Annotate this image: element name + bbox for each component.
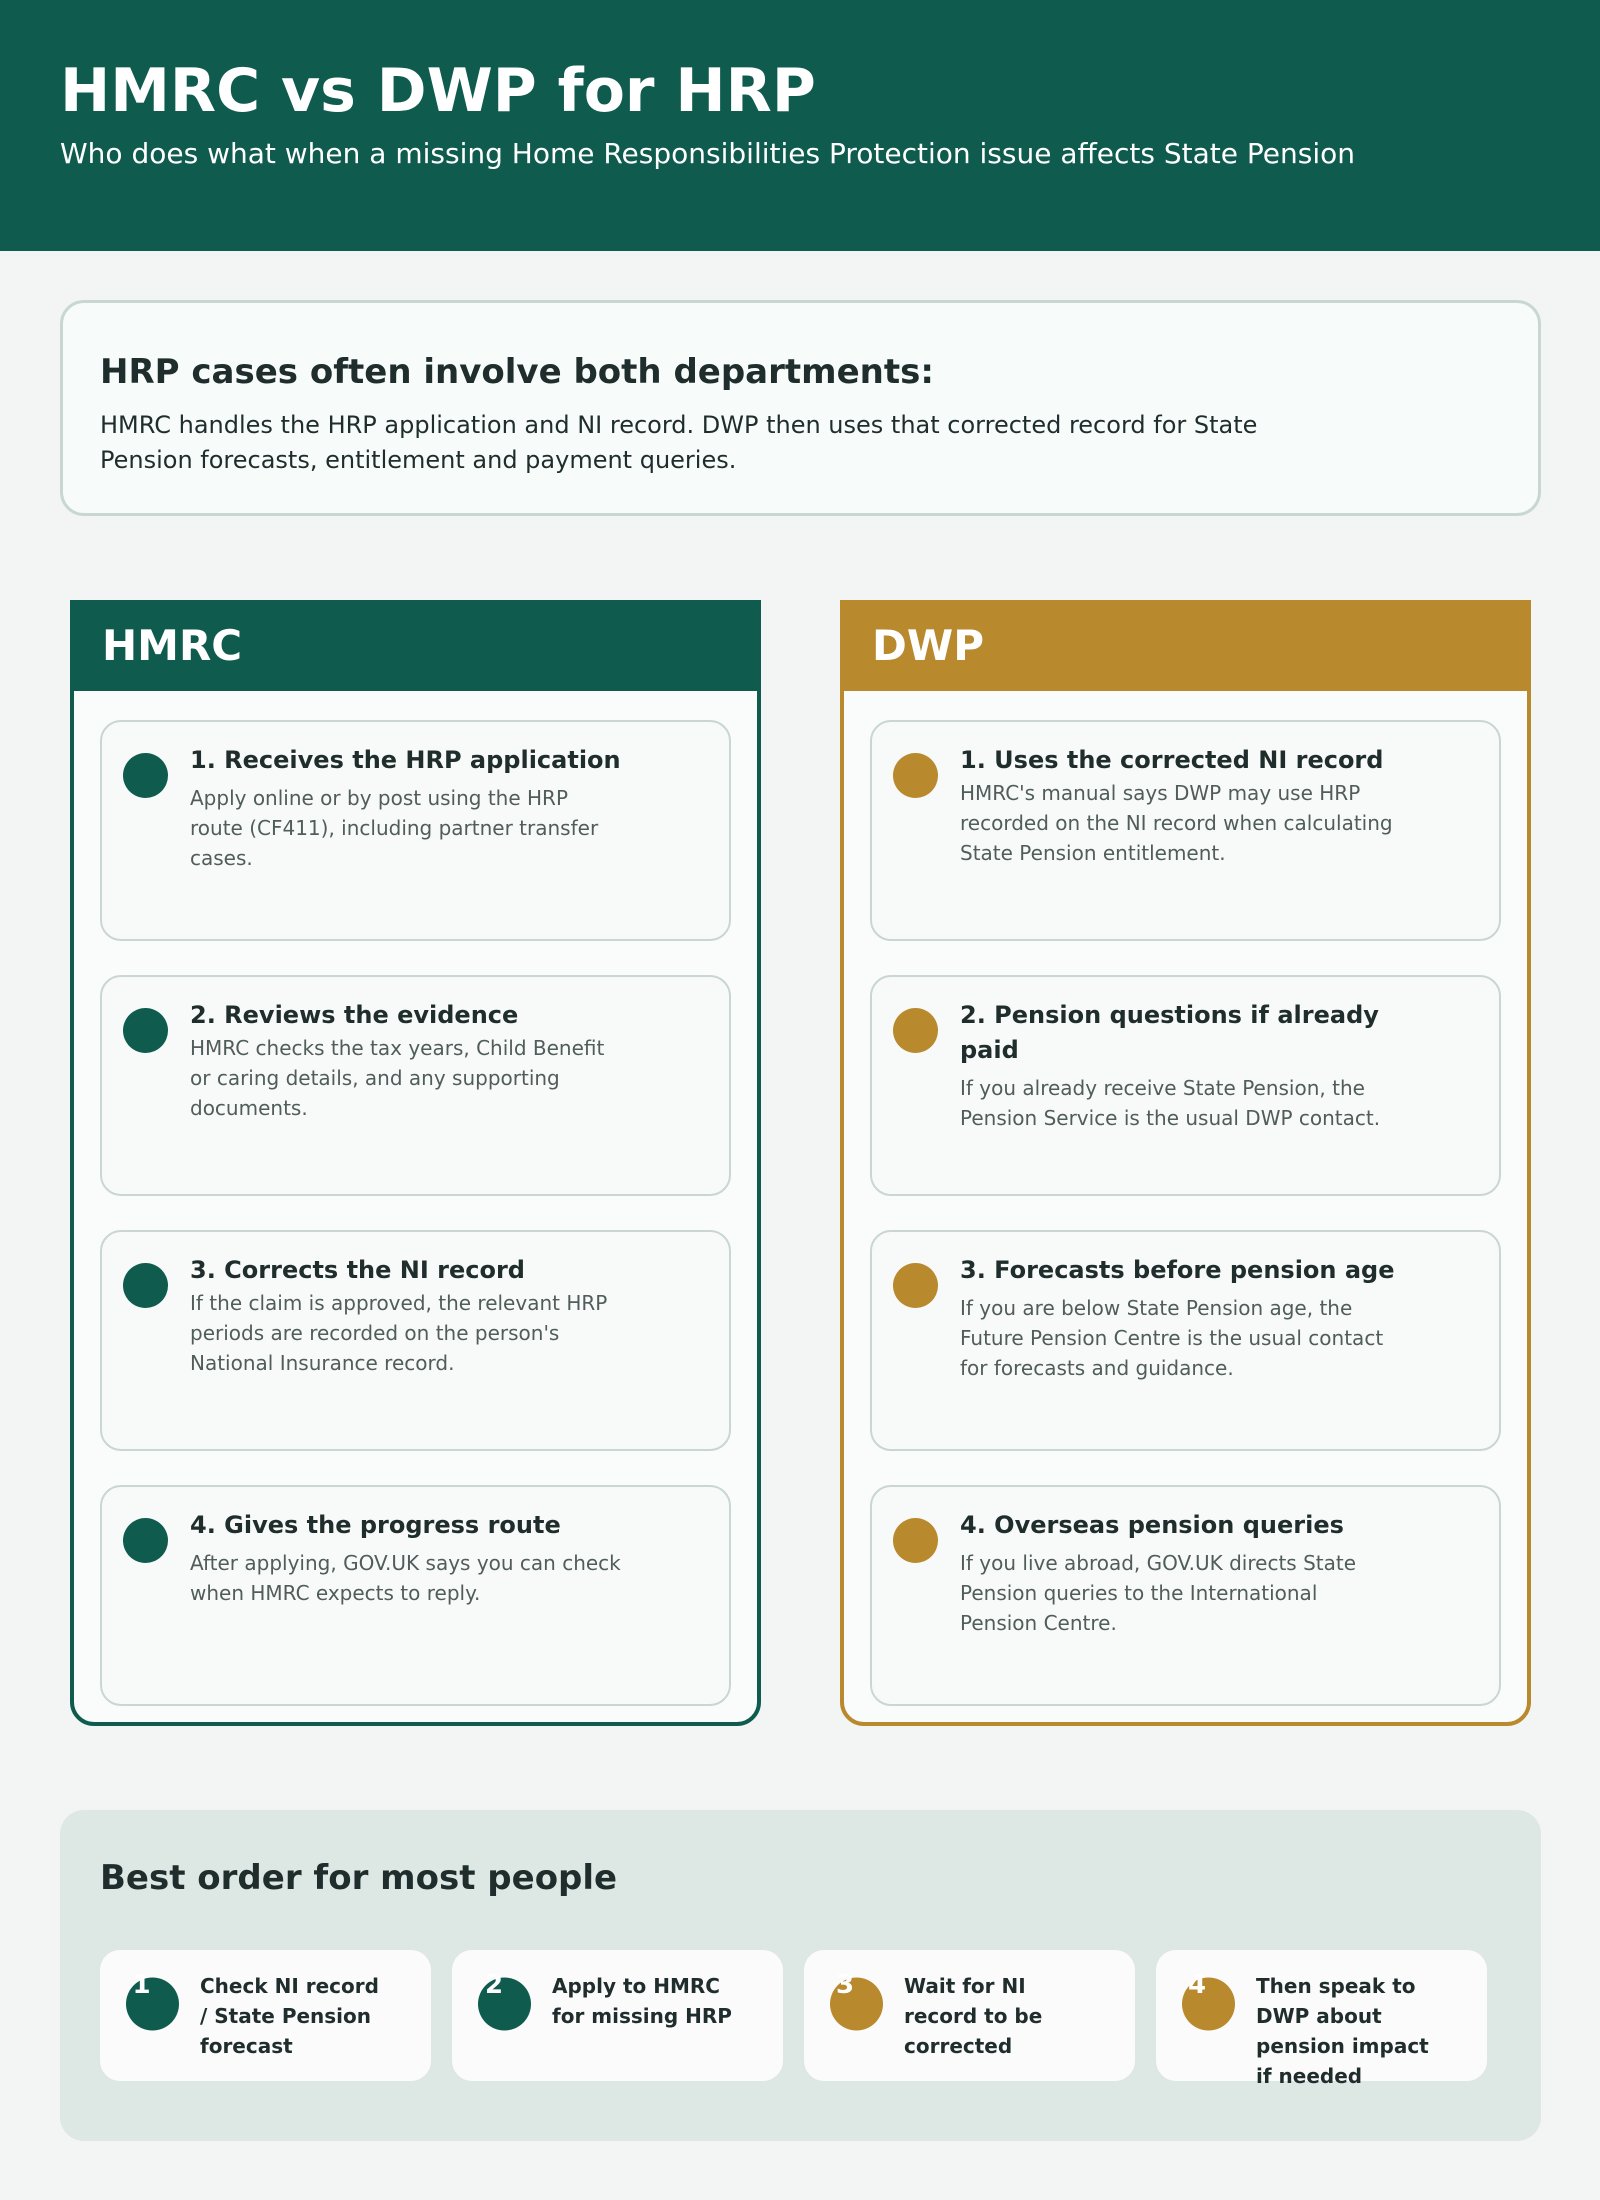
panel: HMRC	[70, 600, 761, 1724]
step: DWP 4: Pension Centre.	[960, 1611, 1117, 1635]
step: DWP 3: If you are below State Pension age, the	[960, 1296, 1352, 1320]
callout text: Pension forecasts, entitlement and payment queries.	[100, 446, 736, 474]
order step 4: DWP about	[1256, 2004, 1382, 2028]
order step 3: record to be	[904, 2004, 1042, 2028]
order step 3: corrected	[904, 2034, 1012, 2058]
step: DWP 1: recorded on the NI record when calculating	[960, 811, 1393, 835]
panel: best order	[60, 1810, 1541, 2141]
step: DWP 3: for forecasts and guidance.	[960, 1356, 1234, 1380]
step: HMRC 1: route (CF411), including partner transfer	[190, 816, 599, 840]
callout: both departments	[62, 302, 1540, 514]
order step 2: Apply to HMRC	[552, 1974, 720, 1998]
order step 1: 1	[132, 1970, 151, 2000]
step: DWP 3: 3. Forecasts before pension age	[960, 1256, 1395, 1284]
callout text: HMRC handles the HRP application and NI record. DWP then uses that corrected record for State	[100, 411, 1257, 439]
step: HMRC 1: 1. Receives the HRP application	[190, 746, 621, 774]
step: DWP 4: 4. Overseas pension queries	[960, 1511, 1344, 1539]
step: HMRC 3: If the claim is approved, the relevant HRP	[190, 1291, 607, 1315]
step: HMRC 3: 3. Corrects the NI record	[190, 1256, 525, 1284]
order step 3: 3	[836, 1970, 854, 2000]
step: DWP 2: 2. Pension questions if already	[960, 1001, 1379, 1029]
step: DWP 1: State Pension entitlement.	[960, 841, 1226, 865]
order step 1	[100, 1950, 431, 2081]
header band	[0, 0, 1600, 251]
step: HMRC 2	[101, 976, 730, 1195]
step: HMRC 4: when HMRC expects to reply.	[190, 1581, 480, 1605]
order step 4: if needed	[1256, 2064, 1362, 2088]
step: HMRC 3	[101, 1231, 730, 1450]
step: HMRC 2: documents.	[190, 1096, 308, 1120]
order step 4: Then speak to	[1256, 1974, 1416, 1998]
subtitle: Who does what when a missing Home Responsibilities Protection issue affects State Pension	[60, 137, 1355, 170]
HMRC heading: HMRC	[102, 621, 242, 670]
step: DWP 3	[871, 1231, 1500, 1450]
order step 2: for missing HRP	[552, 2004, 732, 2028]
order step 2: 2	[485, 1970, 503, 2000]
order step 3: Wait for NI	[904, 1974, 1026, 1998]
step: DWP 2	[871, 976, 1500, 1195]
step: DWP 2: Pension Service is the usual DWP contact.	[960, 1106, 1380, 1130]
order step 1: forecast	[200, 2034, 293, 2058]
step: HMRC 1: cases.	[190, 846, 253, 870]
step: DWP 4	[871, 1486, 1500, 1705]
order step 4: pension impact	[1256, 2034, 1429, 2058]
step: DWP 1: 1. Uses the corrected NI record	[960, 746, 1383, 774]
step: HMRC 3: National Insurance record.	[190, 1351, 454, 1375]
step: HMRC 4	[101, 1486, 730, 1705]
panel: DWP	[840, 600, 1531, 1724]
DWP heading: DWP	[872, 621, 984, 670]
order step 3	[804, 1950, 1135, 2081]
order step 4	[1156, 1950, 1487, 2088]
order step 1: Check NI record	[200, 1974, 379, 1998]
step: DWP 1: HMRC's manual says DWP may use HRP	[960, 781, 1360, 805]
step: DWP 1	[871, 721, 1500, 940]
callout heading: HRP cases often involve both departments:	[100, 352, 934, 392]
order step 1: / State Pension	[200, 2004, 371, 2028]
step: DWP 2: paid	[960, 1036, 1019, 1064]
step: HMRC 4: After applying, GOV.UK says you can check	[190, 1551, 621, 1575]
order step 4: 4	[1188, 1970, 1206, 2000]
step: HMRC 3: periods are recorded on the person's	[190, 1321, 559, 1345]
title: HMRC vs DWP for HRP	[60, 56, 816, 126]
step: DWP 3: Future Pension Centre is the usual contact	[960, 1326, 1383, 1350]
step: HMRC 2: or caring details, and any supporting	[190, 1066, 560, 1090]
step: HMRC 4: 4. Gives the progress route	[190, 1511, 561, 1539]
step: HMRC 2: HMRC checks the tax years, Child Benefit	[190, 1036, 604, 1060]
step: HMRC 1	[101, 721, 730, 940]
step: HMRC 1: Apply online or by post using the HRP	[190, 786, 568, 810]
step: DWP 4: If you live abroad, GOV.UK directs State	[960, 1551, 1356, 1575]
order step 2	[452, 1950, 783, 2081]
step: DWP 4: Pension queries to the International	[960, 1581, 1317, 1605]
best order heading: Best order for most people	[100, 1858, 617, 1898]
step: DWP 2: If you already receive State Pension, the	[960, 1076, 1365, 1100]
step: HMRC 2: 2. Reviews the evidence	[190, 1001, 518, 1029]
